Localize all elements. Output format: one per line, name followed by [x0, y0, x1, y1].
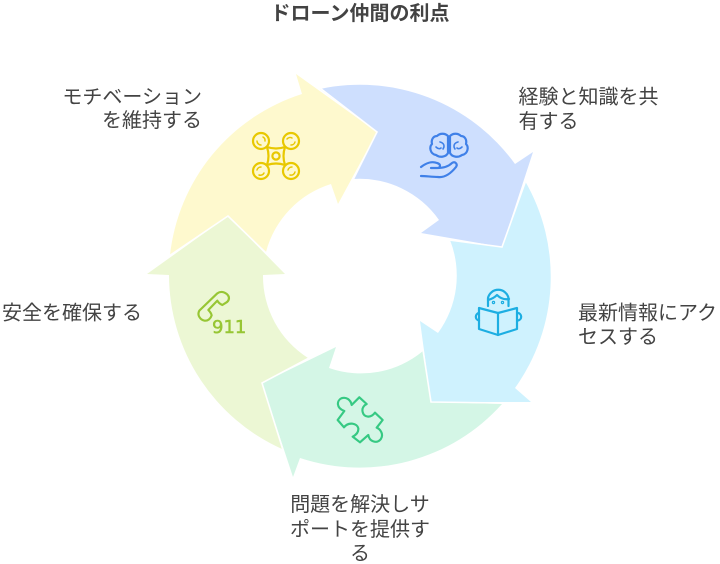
label: share knowledge: 経験と知識を共 [518, 86, 658, 108]
label: latest information: セスする [578, 326, 658, 348]
icon: person reading a book [476, 290, 521, 335]
arrow: motivation (yellow) [170, 74, 377, 255]
icon text: 911: 911 [212, 317, 246, 338]
title: ドローン仲間の利点 [270, 2, 450, 25]
icon: puzzle piece [338, 397, 383, 442]
arrow: safety (green) [147, 216, 309, 450]
label: share knowledge: 有する [518, 110, 578, 133]
icon: brain and hand [421, 134, 468, 177]
label: latest information: 最新情報にアク [578, 302, 717, 324]
arrow: share knowledge (blue) [320, 85, 533, 247]
label: problem solving: 問題を解決しサ [290, 494, 430, 516]
label: motivation: を維持する [102, 109, 202, 132]
arrow: latest information (light blue) [420, 180, 551, 402]
label: motivation: モチベーション [62, 86, 202, 108]
label: safety: 安全を確保する [2, 302, 142, 324]
icon: drone [253, 133, 299, 179]
icon: phone 911 [198, 292, 246, 338]
arrow: problem solving (mint) [262, 347, 503, 477]
label: problem solving: ポートを提供す [290, 518, 430, 541]
